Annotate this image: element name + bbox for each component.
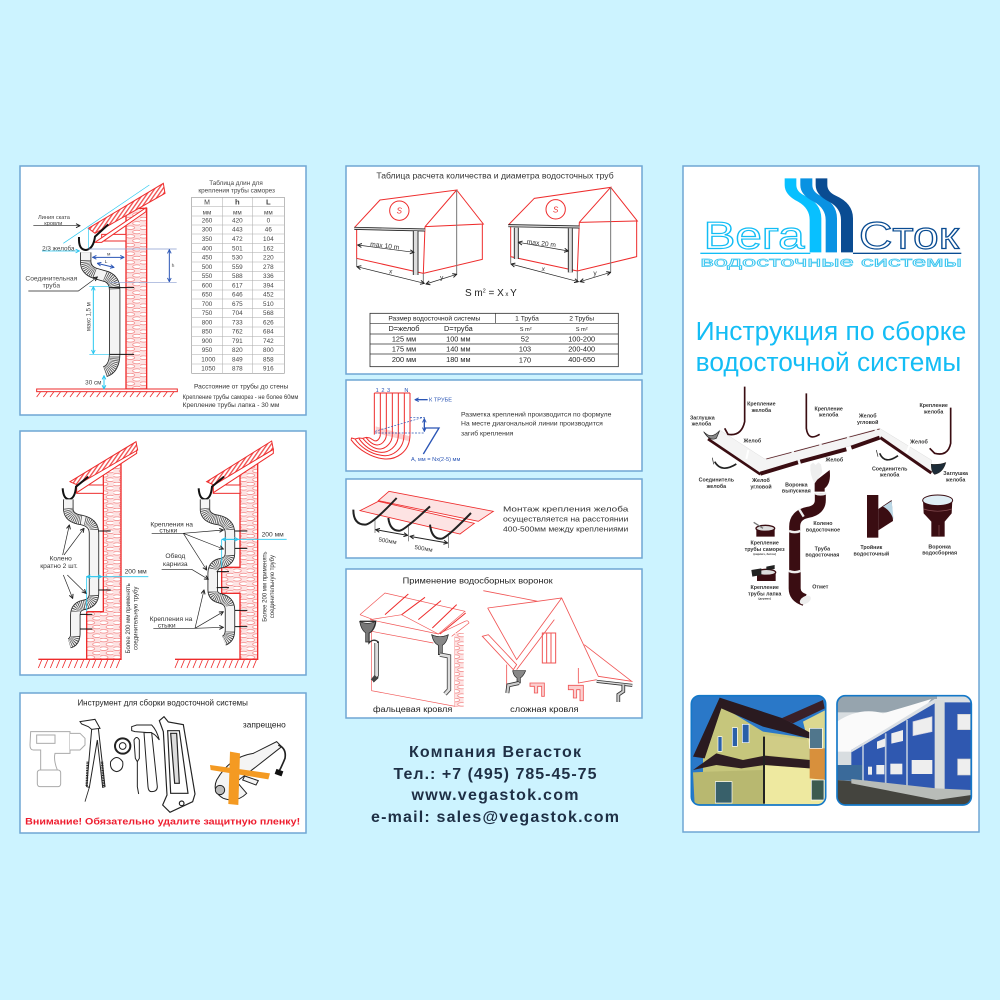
labels: components: желоба [691,421,711,428]
labels: diagram callouts: h [172,263,175,269]
diagram: brackets on boards [353,491,493,548]
labels: left building [40,556,147,653]
contact block: e-mail: sales@vegastok.com [371,809,619,826]
table: pipe diameters: 170 [519,356,531,365]
labels: components: Желоб [751,477,771,484]
table: pipe lengths: 162 [263,245,274,252]
label: complex roof: сложная кровля [510,705,578,714]
table: pipe lengths: 700 [202,301,213,308]
table: pipe lengths: 646 [232,292,243,299]
panel: bracket marking [346,380,642,471]
labels: components: Воронка [785,482,808,488]
panel: pipe routing diagrams [20,431,306,675]
table: pipe lengths: 46 [265,227,272,234]
labels: right building [150,521,284,629]
labels: components: Тройник [860,544,883,551]
heading: calculation table: Таблица расчета количества и диаметра водосточных труб [376,170,614,180]
table: pipe lengths: 336 [263,273,274,280]
labels: house with two pipes: y [593,270,597,277]
contact block: www.vegastok.com [410,787,578,804]
table: pipe lengths: 220 [263,255,274,262]
table: pipe lengths: 278 [263,264,274,271]
table: pipe lengths: 550 [202,273,213,280]
table: pipe lengths: 420 [232,218,243,225]
diagram: house with two pipes [508,187,637,282]
labels: components: выпускная [782,489,811,495]
labels: 500 mm: 500мм [378,537,397,546]
table: pipe lengths: 559 [232,264,243,271]
table: pipe diameters: D=труба [444,324,474,333]
table: pipe diameters: 125 мм [392,334,416,343]
labels: right building: Крепления на [150,616,193,623]
text: distance from pipe to wall: Крепление трубы саморез - не более 60мм [183,393,298,401]
diagram: wall and roof with downpipe [28,183,177,397]
labels: components: Желоб [909,438,929,445]
heading: tools: Инструмент для сборки водосточной системы [77,698,248,707]
table: pipe lengths: 800 [202,319,213,326]
labels: components: Крепление [750,585,779,591]
table: pipe lengths: 626 [263,319,274,326]
labels: right building: Крепления на [150,521,193,528]
formula: S m [465,288,483,299]
labels: components: Заглушка [943,471,968,477]
icon: hacksaw [159,717,195,812]
table: pipe diameters: 200 мм [392,355,416,364]
labels: bracket numbers: N [404,388,408,394]
table: pipe lengths: 733 [232,319,243,326]
table: pipe lengths: 675 [232,301,243,308]
table: pipe lengths: 878 [232,366,243,373]
labels: components: (дерево) [758,596,771,600]
diagram: seam roof [360,593,469,707]
table: pipe lengths: мм [233,209,242,216]
table: pipe diameters: Размер водосточной системы [388,314,481,322]
labels: house with one pipe: S [397,207,403,216]
labels: diagram callouts: Соединительная [25,276,78,283]
table: pipe lengths: 820 [232,347,243,354]
icon: rivet gun [80,719,105,802]
labels: right building: Обвод [165,552,185,560]
labels: components: трубы саморез [745,546,785,553]
photo: house with yellow facade [691,696,826,805]
labels: components: желоба [923,408,943,415]
table: pipe lengths: мм [203,209,211,216]
contact block: Тел.: +7 (495) 785-45-75 [394,766,597,783]
labels: house with one pipe: x [388,269,393,276]
table: pipe diameters: 100-200 [568,334,595,343]
table: pipe lengths: 791 [232,338,243,345]
table: pipe lengths: 588 [232,273,243,280]
icon: hammer [132,725,159,792]
labels: components: (кирпич, бетон) [753,552,776,556]
panel: drain pipe calculation [346,166,642,374]
table: pipe lengths: крепления трубы саморез [198,186,275,194]
labels: diagram callouts: 30 см [85,379,101,386]
contact block [371,744,619,826]
labels: components: Соединитель [699,478,735,484]
labels: left building: кратно 2 шт. [40,563,78,570]
table: pipe lengths: 704 [232,310,243,317]
labels: left building: Колено [49,556,72,563]
table: pipe lengths: 501 [232,245,243,252]
labels: house with two pipes: S [553,205,559,214]
labels: right building: карниза [163,561,188,568]
labels: components: Крепление [747,402,776,408]
table: pipe lengths: 650 [202,292,213,299]
panel: bracket spacing [346,479,642,558]
labels: components: желоба [706,483,726,490]
labels: diagram callouts: макс 1,5 м [87,302,93,331]
title [696,318,966,377]
labels: components: водосточное [806,528,840,534]
labels: components: трубы лапка [748,590,781,597]
panel: tools [20,693,306,833]
labels: components: желоба [945,476,965,483]
labels: components: водосборная [922,550,957,557]
labels: components: водосточная [805,553,839,559]
logo: VegaStok: Сток [859,215,959,257]
label: seam roof: фальцевая кровля [373,705,452,714]
table: pipe lengths: 858 [263,356,274,363]
table: pipe lengths: 510 [263,301,274,308]
formula: = X [486,288,504,299]
diagram: gutter brackets [351,393,439,459]
table: pipe diameters: 103 [519,345,531,354]
labels: components: Крепление [814,406,843,412]
photo: blue industrial building [837,696,971,805]
logo: VegaStok [700,178,962,269]
table: pipe diameters: 100 мм [446,334,471,343]
logo: VegaStok: водосточные системы [700,253,962,269]
warning text: Внимание! Обязательно удалите защитную пленку! [25,816,300,826]
table: pipe lengths: 104 [263,236,274,243]
title: Инструкция по сборке [696,318,966,346]
labels: right building: соединительную трубу [270,555,276,618]
table: pipe lengths: 900 [202,338,213,345]
diagram: house with one pipe [354,190,483,284]
labels: diagram callouts: кровли [44,221,62,227]
table: pipe diameters: 2 Трубы [569,314,594,322]
table: pipe lengths: L [266,197,271,206]
panel: funnel usage [346,569,642,718]
table: pipe lengths: 350 [202,236,213,243]
table: pipe diameters: 1 Труба [515,314,539,322]
text: mounting spacing: Монтаж крепления желоба [503,505,629,514]
table: pipe lengths [192,179,284,373]
table: pipe lengths: 450 [202,255,213,262]
panel: right brochure cover [683,166,979,832]
table: pipe lengths: 568 [263,310,274,317]
heading: funnels: Применение водосборных воронок [403,576,553,586]
labels: components: Желоб [743,437,762,444]
table: pipe diameters [370,313,618,367]
text: distance from pipe to wall: Расстояние от трубы до стены [194,383,289,391]
icon: pipe bracket clamp [751,565,776,581]
text: marking formula: загиб крепления [461,429,514,437]
contact block: Компания Вегасток [409,744,582,761]
icon: pipe bracket screw [754,522,775,537]
table: pipe diameters: 200-400 [568,345,595,354]
table: pipe lengths: 800 [263,347,274,354]
labels: components: Соединитель [872,466,908,472]
labels: diagram callouts: L [105,259,108,265]
labels: house with one pipe: max 10 m [370,241,400,252]
table: pipe lengths: 742 [263,338,274,345]
labels: right building: стыки [159,528,178,535]
text: mounting spacing: осуществляется на расстоянии [503,516,628,523]
diagram: left building [38,442,148,668]
labels: right building: Более 200 мм применять [263,552,269,622]
icon: tape measure [110,738,130,772]
icon: tee pipe [867,495,894,538]
labels: components: Крепление [919,403,948,409]
table: pipe lengths: 762 [232,329,243,336]
labels: components: Труба [815,546,830,553]
labels: house with two pipes: x [541,266,546,273]
labels: diagram callouts: труба [43,281,60,289]
table: pipe lengths: 849 [232,356,243,363]
table: pipe lengths: 916 [263,366,274,373]
logo: VegaStok: Вега [704,215,806,257]
table: pipe lengths: 950 [202,347,213,354]
table: pipe lengths: 452 [263,292,274,299]
table: pipe lengths: 394 [263,282,274,289]
table: pipe lengths: 617 [232,282,243,289]
diagram: gutter system [704,387,951,475]
table: pipe diameters: 52 [521,334,529,343]
labels: components: Заглушка [690,415,715,421]
table: pipe lengths: мм [264,209,273,216]
labels: diagram callouts [25,215,175,386]
labels: left building: соединительную трубу [133,587,139,650]
labels: components: Отмет [812,585,829,591]
icon: screwdriver [134,737,139,794]
table: pipe lengths: 443 [232,227,243,234]
labels: house with two pipes [526,205,597,277]
table: pipe lengths: 400 [202,245,213,252]
formula: x Y [505,288,517,299]
diagram: complex roof [482,591,632,701]
table: pipe lengths: 300 [202,227,213,234]
labels: components: Желоб [858,412,877,419]
labels: components: водосточный [853,550,889,557]
table: pipe diameters: 175 мм [392,345,416,354]
labels: bracket numbers: 2 [381,388,384,394]
labels: house with one pipe: y [440,274,444,281]
labels: bracket numbers: 3 [387,388,390,394]
formula: 2 [483,288,486,294]
labels: components: Воронка [928,544,951,550]
labels: 500 mm: 500мм [414,545,433,554]
text: mounting spacing: 400-500мм между креплениями [503,526,628,533]
labels: bracket numbers: 1 [376,388,379,394]
diagram: downpipe assembly [789,462,830,606]
labels: components: Крепление [750,541,779,547]
text: marking formula: На месте диагональной линии производится [461,420,603,428]
table: pipe lengths: 472 [232,236,243,243]
labels: components: угловой [750,484,772,491]
panel: pipe mounting table [20,166,306,415]
diagram: right building [152,441,287,668]
labels: components: Колено [813,521,833,527]
labels: right building: стыки [158,622,176,629]
table: pipe lengths: 260 [202,218,213,225]
text: marking formula: Разметка креплений производится по формуле [461,410,612,418]
text: mounting spacing [503,505,629,533]
table: pipe lengths: 750 [202,310,213,317]
labels: left building: 200 мм [125,569,147,576]
table: pipe lengths: 1000 [201,356,216,363]
table: pipe diameters: S m² [520,327,532,333]
table: pipe lengths: 600 [202,282,213,289]
text: marking formula [461,410,612,437]
labels: components: желоба [818,412,838,419]
table: pipe lengths: 850 [202,329,213,336]
icon: drill [30,732,85,787]
table: pipe lengths: 1050 [201,366,216,373]
labels: right building: 200 мм [262,532,284,539]
labels: components: желоба [751,407,771,414]
icon: forbidden grinder [210,742,285,805]
table: pipe diameters: S m² [576,327,588,333]
table: pipe lengths: 0 [267,218,271,225]
text: distance from pipe to wall [183,383,298,409]
labels: diagram callouts: 2/3 желоба [42,244,75,252]
labels: components: Желоб [825,457,844,464]
labels: components: угловой [857,419,878,426]
table: pipe diameters: 180 мм [446,355,471,364]
table: pipe lengths: Таблица длин для [209,179,263,187]
label: forbidden: запрещено [243,720,286,730]
text: distance from pipe to wall: Крепление трубы лапка - 30 мм [183,401,279,409]
table: pipe lengths: 684 [263,329,274,336]
labels: components [690,402,968,600]
table: pipe diameters: 400-650 [568,355,595,364]
labels: house with two pipes: max 20 m [526,239,557,249]
table: pipe lengths: 500 [202,264,213,271]
table: pipe lengths: h [235,197,240,206]
table: pipe lengths: 530 [232,255,243,262]
labels: diagram callouts: м [107,252,111,258]
title: водосточной системы [696,349,961,377]
labels: left building: Более 200 мм применять [126,583,132,653]
labels: components: желоба [879,471,899,478]
table: pipe diameters: D=желоб [389,324,419,333]
labels: house with one pipe [370,207,444,281]
labels: bracket numbers: К ТРУБЕ [429,398,452,404]
labels: diagram callouts: Линия ската [38,215,71,221]
table: pipe lengths: М [204,199,210,206]
table: pipe diameters: 140 мм [446,345,471,354]
icon: collecting funnel [923,495,953,537]
funnel and gutter: complex roof [507,671,632,702]
labels: 500 mm [378,537,433,554]
labels: bracket numbers [376,388,460,463]
labels: bracket numbers: А, мм = Nx(2-5) мм [411,457,460,463]
